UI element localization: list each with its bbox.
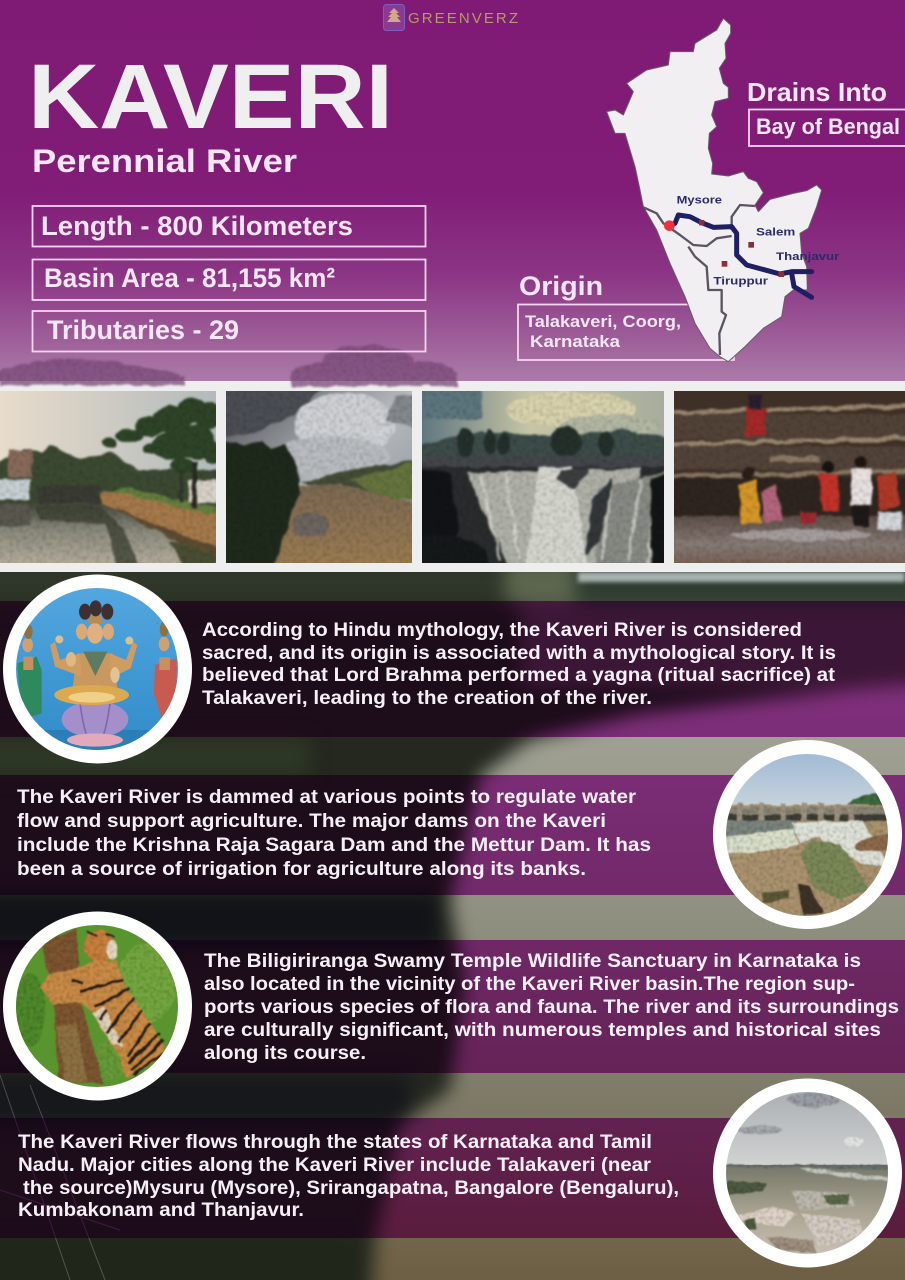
stat box: tributaries: Tributaries - 29 [47,315,239,345]
text block: dams: been a source of irrigation for agriculture along its banks. [17,859,586,880]
subtitle: Perennial River [32,143,297,179]
text block: cities [18,1132,679,1221]
photo: people bathing at temple steps [664,391,905,573]
circle photo: city and river aerial view [713,1078,902,1268]
stat box: length [32,206,426,246]
stat box: basin area [32,260,426,300]
text block: mythology: According to Hindu mythology, the Kaveri River is considered [202,620,802,641]
tree silhouettes at header bottom [0,345,457,386]
logo: Greenverz: GREENVERZ [408,10,518,27]
text block: wildlife: along its course. [204,1043,366,1064]
stat box: tributaries [32,311,426,352]
text block: mythology: sacred, and its origin is associated with a mythological story. It is [202,643,836,664]
circle photo: tiger hugging tree [3,912,192,1100]
map: Kaveri river course: Tiruppur [713,275,769,287]
text block: wildlife: The Biligiriranga Swamy Temple Wildlife Sanctuary in Karnataka is [204,951,861,972]
text block: dams: include the Krishna Raja Sagara Dam and the Mettur Dam. It has [17,835,651,856]
callout: bay of bengal: Bay of Bengal [756,114,900,139]
title: KAVERI [28,46,393,148]
panel: purple header [0,0,905,386]
text block: cities: Nadu. Major cities along the Kaveri River include Talakaveri (near [18,1155,652,1176]
map: Kaveri river course: Thanjavur [776,251,840,263]
text block: dams: flow and support agriculture. The major dams on the Kaveri [17,811,606,832]
band: wildlife [0,940,905,1073]
text block: dams [17,787,651,880]
circle photo: Lord Brahma statue [3,574,192,764]
callout: origin location: Talakaveri, Coorg, [525,313,681,331]
panel: blurred river landscape background [0,560,905,1280]
text block: dams: The Kaveri River is dammed at various points to regulate water [17,787,637,808]
band: cities [0,1118,905,1238]
stat box: length: Length - 800 Kilometers [41,211,353,241]
map: Kaveri river course [607,18,840,362]
photo: waterfall [422,391,664,563]
stat box: basin area: Basin Area - 81,155 km² [44,263,335,293]
text block: wildlife: also located in the vicinity of the Kaveri River basin.The region sup- [204,974,855,995]
callout: bay of bengal [749,110,905,146]
text block: wildlife: are culturally significant, with numerous temples and historical sites [204,1020,881,1041]
text block: cities: Kumbakonam and Thanjavur. [18,1200,304,1221]
text block: cities: the source)Mysuru (Mysore), Srirangapatna, Bangalore (Bengaluru), [23,1178,679,1199]
text block: wildlife: ports various species of flora and fauna. The river and its surroundings [204,997,899,1018]
text block: mythology: believed that Lord Brahma performed a yagna (ritual sacrifice) at [202,665,836,686]
heading: drains into: Drains Into [747,77,887,107]
photo: riverside town [0,391,216,563]
text block: mythology [202,620,836,709]
callout: origin location [518,304,734,360]
heading: origin: Origin [519,271,603,301]
text block: cities: The Kaveri River flows through the states of Karnataka and Tamil [18,1132,652,1153]
map: Kaveri river course: Salem [756,226,796,238]
map: Kaveri river course: Mysore [677,194,722,206]
logo: Greenverz [384,4,518,30]
photo: brown river under cloudy sky [226,391,412,563]
text block: wildlife [204,951,899,1064]
text block: mythology: Talakaveri, leading to the creation of the river. [202,688,652,709]
band: dams [0,775,905,895]
circle photo: Krishna Raja Sagara dam [713,740,902,932]
band: mythology [0,601,905,737]
callout: origin location: Karnataka [530,333,621,351]
